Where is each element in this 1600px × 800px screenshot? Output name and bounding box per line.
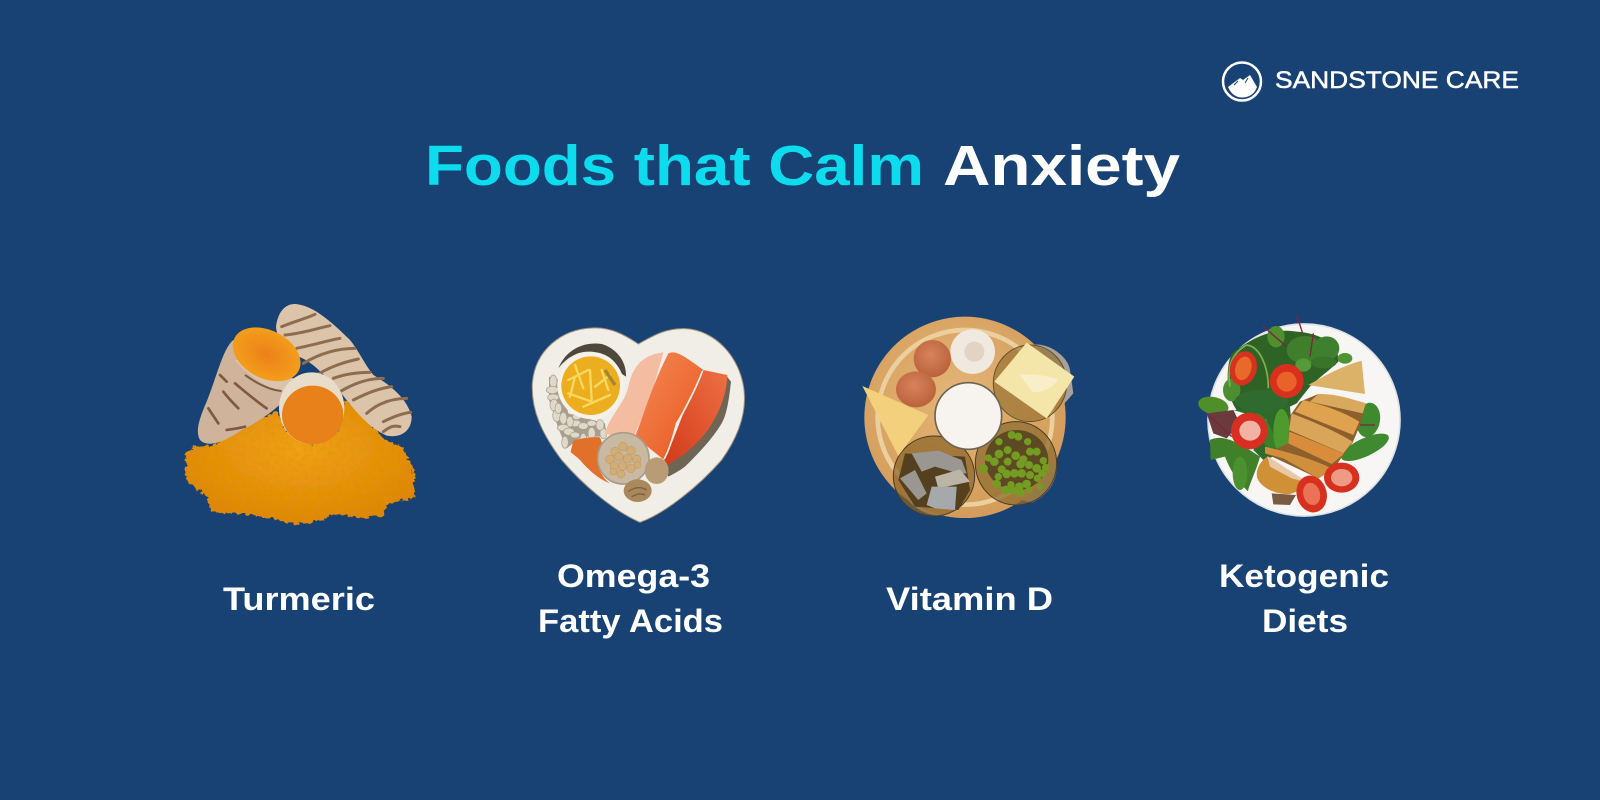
- illustration: chicken salad plate: [1197, 315, 1400, 516]
- logo wordmark: SANDSTONE CARE: [1275, 67, 1519, 94]
- illustration: turmeric roots and powder: [185, 304, 414, 523]
- label: Ketogenic Diets: [1219, 558, 1389, 639]
- label: Omega-3 Fatty Acids: Omega-3: [557, 558, 710, 594]
- logo: [1223, 62, 1519, 100]
- label: Ketogenic Diets: Ketogenic: [1219, 558, 1389, 594]
- title white text: Anxiety: [943, 134, 1180, 198]
- panel: ketogenic diets: [1197, 315, 1400, 639]
- label: Turmeric: Turmeric: [223, 581, 375, 617]
- label: Omega-3 Fatty Acids: [538, 558, 723, 639]
- panel: turmeric: [185, 304, 414, 617]
- title: [425, 134, 1180, 198]
- title accent text: Foods that Calm: [425, 134, 924, 198]
- label: Ketogenic Diets: Diets: [1262, 603, 1348, 639]
- panel: omega-3: [532, 328, 744, 639]
- illustration: wooden board with vitamin D foods: [862, 317, 1074, 518]
- panel: vitamin D: [862, 317, 1074, 617]
- label: Vitamin D: Vitamin D: [886, 581, 1053, 617]
- illustration: heart plate with salmon: [532, 328, 744, 522]
- logo mark: mountain in circle: [1223, 62, 1261, 100]
- label: Omega-3 Fatty Acids: Fatty Acids: [538, 603, 723, 639]
